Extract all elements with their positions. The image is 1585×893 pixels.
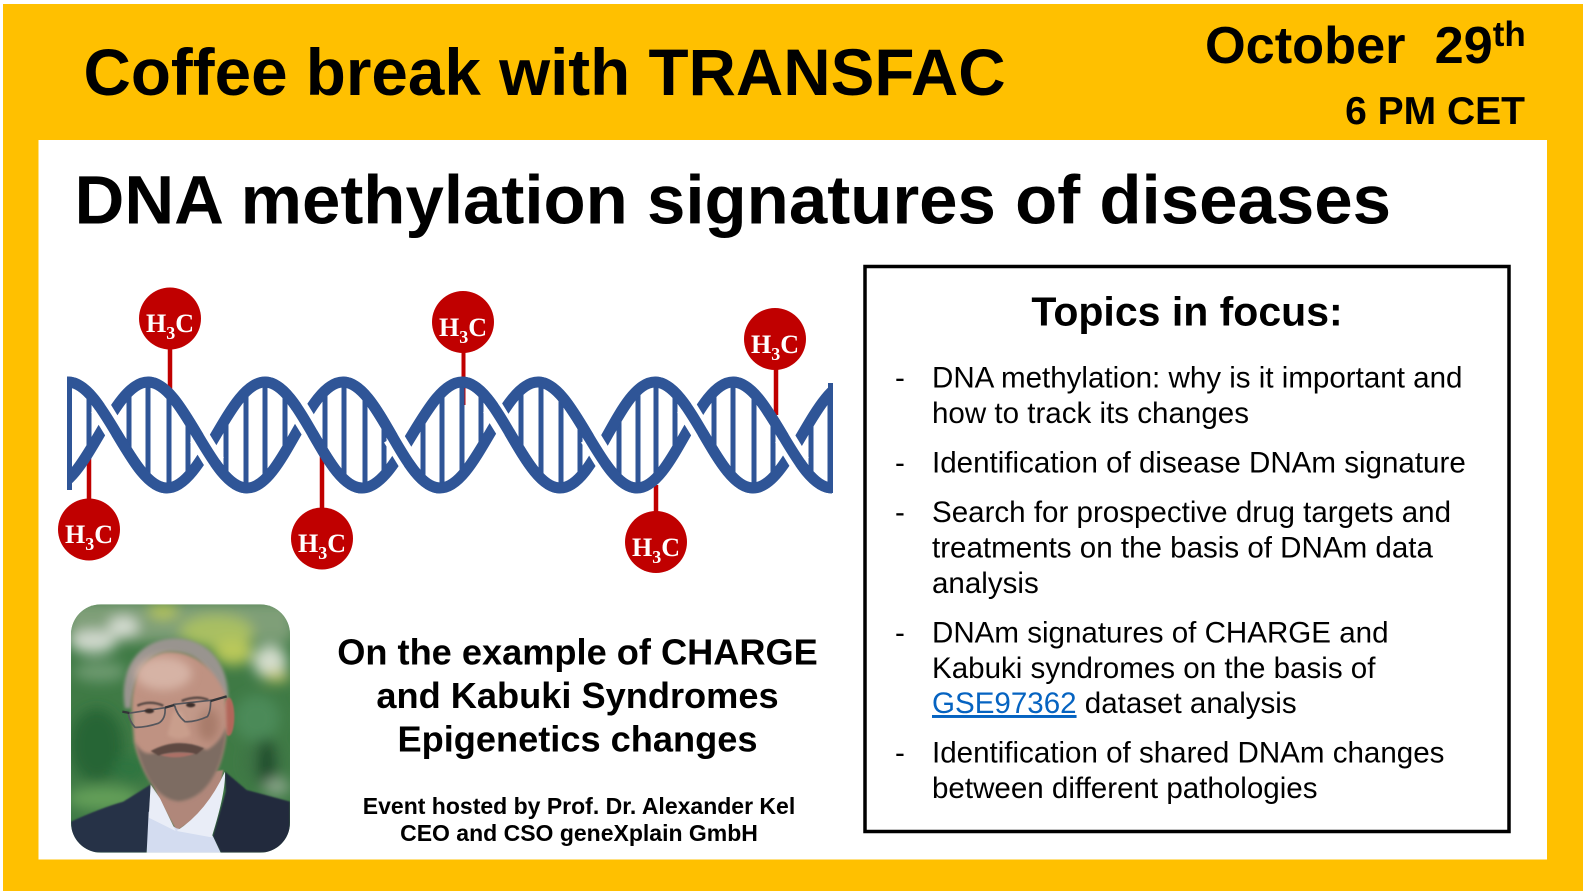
topic 2: - [895, 446, 905, 480]
topic 5: between different pathologies [932, 772, 1318, 805]
DNA helix illustration with methyl groups [0, 288, 851, 573]
host credit: CEO and CSO geneXplain GmbH [400, 820, 758, 846]
methyl group 2: H [65, 520, 85, 549]
subtitle: example: On the example of CHARGE [337, 632, 818, 672]
methyl group 3: H [298, 529, 318, 558]
methyl group 6: C [661, 533, 680, 562]
topic 4: GSE97362 dataset analysis [932, 687, 1297, 720]
host credit [363, 793, 795, 846]
methyl group 2: C [94, 520, 113, 549]
topic 3: - [895, 496, 905, 529]
main heading: DNA methylation signatures of diseases [74, 162, 1391, 238]
topic 1 [895, 362, 1462, 430]
methyl group 6: 3 [652, 547, 661, 567]
methyl group 2 [58, 498, 120, 560]
event time: 6 PM CET [1345, 90, 1525, 133]
methyl group 6 [625, 511, 687, 573]
event date: October 29 [1205, 17, 1493, 75]
methyl group 1: 3 [166, 323, 175, 343]
topic 4: - [895, 616, 905, 650]
lips [160, 753, 195, 757]
topic 1: - [895, 362, 905, 394]
topic 5: - [895, 736, 905, 770]
topics heading: Topics in focus: [1031, 288, 1343, 334]
eyes [145, 709, 154, 713]
host credit: Event hosted by Prof. Dr. Alexander Kel [363, 793, 795, 819]
methyl group 3: C [327, 529, 346, 558]
eyebrows [137, 698, 208, 706]
forehead highlight [135, 657, 192, 690]
methyl group 1 [139, 288, 201, 350]
beard [135, 727, 226, 802]
methyl group 4: 3 [459, 327, 468, 347]
methyl group 6: H [632, 533, 652, 562]
face [132, 652, 227, 802]
methyl group 2: 3 [85, 534, 94, 554]
speaker portrait illustration [67, 602, 293, 853]
topic 3 [895, 496, 1451, 600]
moustache [151, 743, 204, 756]
methyl group 5: 3 [771, 344, 780, 364]
methyl connector lines [89, 340, 776, 525]
topic 3: analysis [932, 567, 1039, 600]
shirt [147, 812, 221, 853]
methyl group 5: H [751, 330, 771, 359]
methyl group 1: C [175, 309, 194, 338]
topic 4 [895, 616, 1389, 720]
subtitle: example [337, 632, 818, 760]
subtitle: example: and Kabuki Syndromes [376, 675, 779, 716]
methyl group 5: C [780, 330, 799, 359]
header title: Coffee break with TRANSFAC [84, 36, 1006, 109]
topics panel [865, 266, 1509, 832]
methyl group 4 [432, 291, 494, 353]
topic 2: Identification of disease DNAm signature [932, 446, 1466, 480]
ear [223, 697, 234, 736]
white content panel [38, 140, 1547, 860]
topic 3: treatments on the basis of DNAm data [932, 532, 1433, 564]
nose [169, 712, 188, 738]
methyl group 3: 3 [318, 543, 327, 563]
hair [124, 638, 228, 708]
methyl group 4: C [468, 313, 487, 342]
topic 5: Identification of shared DNAm changes [932, 736, 1444, 770]
event date: th [1493, 15, 1526, 54]
topic 3: Search for prospective drug targets and [932, 496, 1451, 529]
methyl group 1: H [146, 309, 166, 338]
cheek shading [198, 708, 219, 742]
methyl group 4: H [439, 313, 459, 342]
topic 1: DNA methylation: why is it important and [932, 362, 1462, 394]
methyl group 5 [744, 308, 806, 370]
jacket [71, 784, 152, 853]
topic 4: DNAm signatures of CHARGE and [932, 616, 1389, 650]
right end bar [828, 383, 833, 493]
helix strands and base pairs [0, 382, 851, 488]
methyl group 3 [291, 508, 353, 570]
glasses [128, 700, 211, 727]
topic 5 [895, 736, 1444, 805]
topic 1: how to track its changes [932, 397, 1249, 430]
neck [152, 770, 223, 831]
left end bar [67, 377, 72, 490]
topic 4: Kabuki syndromes on the basis of [932, 652, 1376, 685]
subtitle: example: Epigenetics changes [398, 718, 757, 760]
